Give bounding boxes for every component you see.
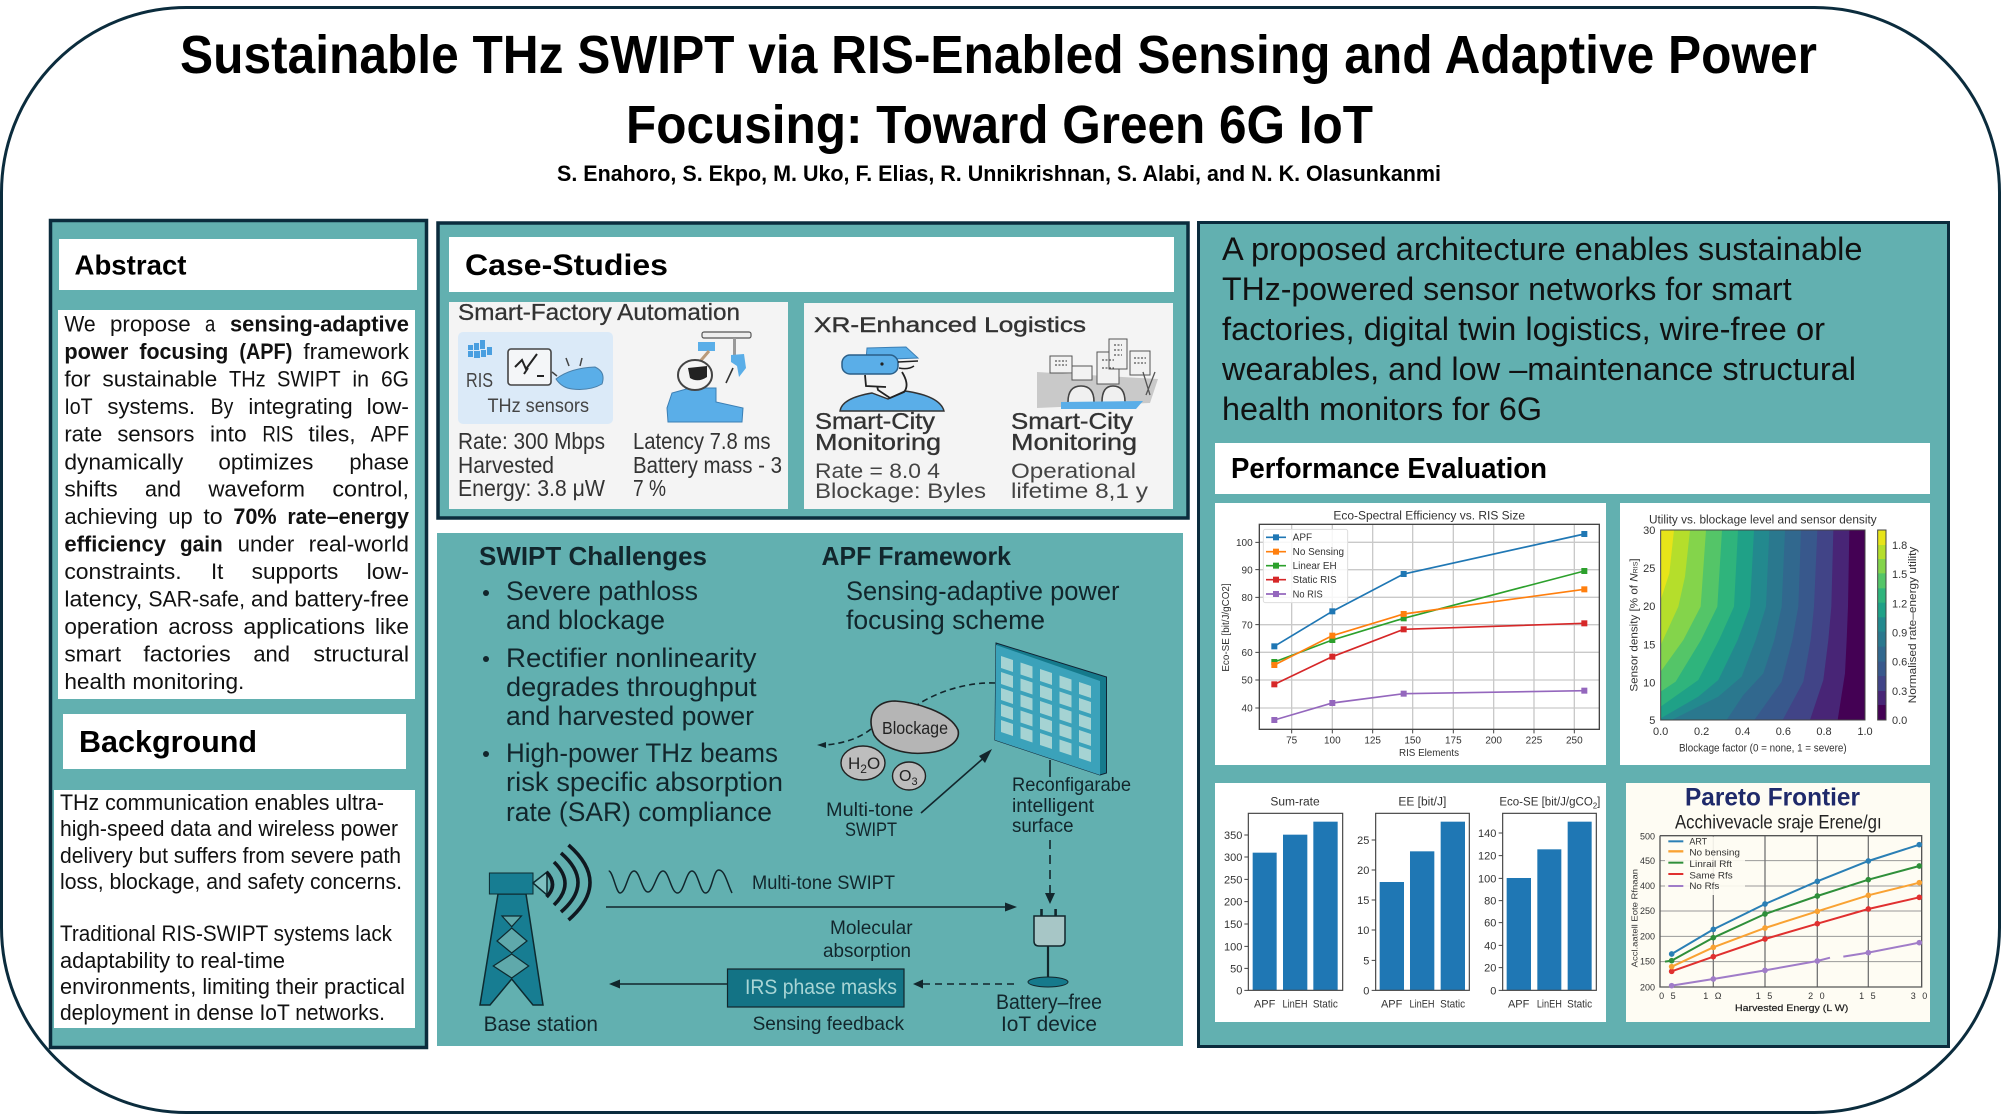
text block: abstract body: waveform (207, 476, 305, 501)
line chart: Pareto frontier: 500 (1640, 832, 1655, 842)
line chart: Pareto frontier: Same Rfs (1689, 870, 1733, 880)
text block: abstract body: low- (367, 559, 409, 584)
text block: abstract body: and (253, 641, 290, 666)
card: XR-enhanced logistics: Monitoring (815, 429, 941, 455)
text block: background body: deployment in dense IoT networks. (60, 1000, 385, 1025)
text block: abstract body: a (205, 311, 216, 336)
heading: performance evaluation: Performance Evaluation (1231, 453, 1547, 485)
bar chart: EE: 15 (1357, 895, 1369, 907)
text block: abstract body: propose (110, 311, 191, 336)
bar chart: sum-rate: 300 (1224, 852, 1242, 864)
bar chart: sum-rate: LinEH (1282, 998, 1308, 1010)
contour chart: utility vs blockage and sensor density: Blockage factor (0 = none, 1 = severe) (1679, 743, 1847, 755)
text block: proposed architecture summary: A proposed architecture enables sustainable (1222, 231, 1862, 267)
heading: background: Background (79, 724, 257, 759)
text block: abstract body: THz (229, 366, 266, 391)
card: XR-enhanced logistics: lifetime 8,1 y (1011, 480, 1149, 503)
text block: SWIPT challenges: Rectifier nonlinearity (506, 643, 757, 673)
contour chart: utility vs blockage and sensor density: 0.0 (1653, 726, 1668, 738)
line chart: eco-spectral efficiency vs RIS size: 40 (1242, 704, 1253, 715)
panel: SWIPT challenges and APF framework (437, 533, 1183, 1046)
heading: performance evaluation (1215, 443, 1930, 494)
text block: abstract body: SAR-safe, (148, 586, 245, 611)
line chart: Pareto frontier (1626, 783, 1930, 1022)
title: Focusing: Toward Green 6G IoT (626, 95, 1373, 155)
bar chart: EE: Static (1440, 998, 1466, 1010)
line chart: eco-spectral efficiency vs RIS size: 90 (1242, 565, 1253, 576)
contour chart: utility vs blockage and sensor density: 1.0 (1857, 726, 1873, 738)
card: smart-factory automation: 7 % (633, 475, 666, 501)
card: XR-enhanced logistics: Smart-City (1011, 408, 1134, 434)
line chart: Pareto frontier: 150 (1640, 957, 1655, 967)
text block: abstract body: control, (332, 476, 409, 501)
authors: S. Enahoro, S. Ekpo, M. Uko, F. Elias, R. Unnikrishnan, S. Alabi, and N. K. Olasunkanmi (557, 161, 1441, 186)
box: IRS phase masks (728, 969, 904, 1007)
line chart: Pareto frontier: 1 Ω (1703, 991, 1723, 1001)
bar chart: EE: 5 (1363, 955, 1369, 967)
line chart: Pareto frontier: 1 5 (1859, 991, 1878, 1001)
icon: smart city with bridge (1037, 339, 1158, 409)
text block: abstract body: applications (243, 614, 365, 639)
text block: background body: adaptability to real-time (60, 948, 285, 973)
label: molecular absorption (823, 917, 913, 962)
card: smart-factory automation: Harvested (458, 452, 554, 478)
icon: RIS and THz sensors: THz sensors (488, 396, 589, 417)
bar chart: eco-SE (1478, 795, 1600, 1010)
text block: abstract body: optimizes (218, 449, 313, 474)
bar chart: eco-SE: 120 (1478, 851, 1496, 863)
text block: abstract body: integrating (248, 394, 353, 419)
contour chart: utility vs blockage and sensor density (1620, 503, 1930, 765)
bar chart: sum-rate: Static (1313, 998, 1338, 1010)
text block: abstract body: low- (367, 394, 409, 419)
line chart: Pareto frontier: 1 5 (1756, 991, 1774, 1001)
card: XR-enhanced logistics: Rate = 8.0 4 (815, 460, 940, 483)
title (180, 25, 1817, 155)
contour chart: utility vs blockage and sensor density: 15 (1643, 639, 1655, 651)
line chart: eco-spectral efficiency vs RIS size: 225 (1526, 735, 1543, 746)
bar chart: sum-rate: 150 (1224, 919, 1242, 931)
contour chart: utility vs blockage and sensor density: Sensor density [% of NRIS] (1628, 558, 1640, 692)
text block: background body: delivery but suffers from severe path (60, 843, 401, 868)
card: smart-factory automation: Rate: 300 Mbps (458, 428, 605, 454)
text block: abstract body: sensing-adaptive (230, 311, 409, 336)
icon: water and ozone molecules: O (899, 768, 911, 785)
contour chart: utility vs blockage and sensor density: 30 (1643, 525, 1655, 537)
icon: water and ozone molecules: 3 (911, 776, 918, 788)
bar chart: eco-SE: LinEH (1537, 998, 1562, 1010)
line chart: Pareto frontier: ART (1689, 836, 1708, 846)
text block: abstract body: supports (252, 559, 338, 584)
line chart: eco-spectral efficiency vs RIS size: 250 (1566, 735, 1583, 746)
text block: proposed architecture summary (1221, 231, 1862, 427)
label: reconfigurable intelligent surface: intelligent (1012, 795, 1095, 817)
line chart: Pareto frontier: 400 (1640, 881, 1655, 891)
text block: abstract body: (APF) (239, 339, 292, 364)
bar chart: EE: 0 (1363, 985, 1369, 997)
contour chart: utility vs blockage and sensor density: 25 (1643, 563, 1655, 575)
contour chart: utility vs blockage and sensor density: 1.5 (1892, 569, 1907, 581)
text block: proposed architecture summary: wearables, and low –maintenance structural (1221, 351, 1856, 387)
text block: abstract body: power (64, 339, 129, 364)
title: Sustainable THz SWIPT via RIS-Enabled Sensing and Adaptive Power (180, 25, 1817, 85)
line chart: eco-spectral efficiency vs RIS size: 100 (1236, 538, 1253, 549)
text block: abstract body: structural (313, 641, 409, 666)
card: XR-enhanced logistics (804, 303, 1173, 509)
text block: SWIPT challenges: Severe pathloss (506, 576, 698, 606)
contour chart: utility vs blockage and sensor density: 0.9 (1892, 628, 1907, 640)
bar chart: EE: LinEH (1409, 998, 1435, 1010)
text block: abstract body: for (64, 366, 91, 391)
text block: SWIPT challenges: and harvested power (506, 701, 754, 731)
bar chart: EE: 10 (1357, 925, 1369, 937)
text block: abstract body: and (145, 476, 181, 501)
bar chart: eco-SE: 60 (1484, 918, 1496, 930)
text block: abstract body: battery-free (294, 586, 409, 611)
text block: background body: Traditional RIS-SWIPT systems lack (60, 921, 393, 946)
text block: abstract body: RIS (262, 421, 293, 446)
arrow: RIS to IoT device, dashed (1045, 840, 1055, 904)
bar chart: eco-SE: APF (1508, 998, 1530, 1010)
card: smart-factory automation (449, 299, 788, 509)
line chart: Pareto frontier: 0 5 (1659, 991, 1678, 1001)
line chart: Pareto frontier: 250 (1640, 906, 1655, 916)
card: XR-enhanced logistics: Operational (1011, 460, 1136, 483)
text block: abstract body: real-world (309, 531, 409, 556)
icon: blockage blob and reflected path: Blockage (882, 718, 948, 738)
label: battery-free IoT device: IoT device (1001, 1013, 1097, 1036)
label: molecular absorption: absorption (823, 940, 911, 962)
bar chart: sum-rate: 100 (1224, 941, 1242, 953)
card: smart-factory automation: Latency 7.8 ms (633, 428, 770, 454)
label: reconfigurable intelligent surface: Reconfigarabe (1012, 774, 1131, 796)
icon: person wearing XR headset (840, 347, 944, 411)
text block: proposed architecture summary: health monitors for 6G (1222, 391, 1542, 427)
bar chart: EE: 25 (1357, 835, 1369, 847)
icon: water and ozone molecules: O (867, 754, 880, 773)
bar chart: sum-rate (1224, 795, 1343, 1010)
label: battery-free IoT device (996, 991, 1102, 1036)
contour chart: utility vs blockage and sensor density: 0.6 (1892, 657, 1907, 669)
line chart: eco-spectral efficiency vs RIS size: APF (1293, 533, 1312, 544)
line chart: eco-spectral efficiency vs RIS size: 100 (1324, 735, 1341, 746)
text block: abstract body: By (211, 394, 234, 419)
bar charts: sum-rate, EE and eco-SE (1215, 783, 1606, 1022)
label: molecular absorption: Molecular (830, 917, 913, 939)
label: reconfigurable intelligent surface (1012, 774, 1131, 837)
line chart: Pareto frontier: 200 (1640, 983, 1655, 993)
line chart: eco-spectral efficiency vs RIS size: 200 (1485, 735, 1502, 746)
contour chart: utility vs blockage and sensor density: 0.2 (1694, 726, 1709, 738)
line chart: Pareto frontier: 2 0 (1808, 991, 1827, 1001)
bar chart: eco-SE: Static (1567, 998, 1593, 1010)
contour chart: utility vs blockage and sensor density: 10 (1643, 677, 1655, 689)
arrow: IoT device feedback to IRS masks (913, 980, 1014, 988)
icon: RIS and THz sensors (458, 332, 613, 424)
heading: case studies (449, 237, 1174, 292)
text block: abstract body: achieving (64, 504, 158, 529)
text block: SWIPT challenges: risk specific absorption (506, 767, 783, 797)
bar chart: EE: 20 (1357, 865, 1369, 877)
text block: abstract body: health monitoring. (64, 669, 244, 694)
text block: proposed architecture summary: THz-powered sensor networks for smart (1222, 271, 1792, 307)
text block: background body: environments, limiting their practical (60, 974, 405, 999)
icon: battery-free IoT device (1028, 909, 1068, 987)
bar chart: sum-rate: APF (1254, 998, 1276, 1010)
bar chart: sum-rate: 250 (1224, 874, 1242, 886)
text block: abstract body: rate–energy (287, 504, 409, 529)
text block: abstract body: 6G (381, 366, 409, 391)
text block: abstract body: rate (64, 421, 102, 446)
line chart: eco-spectral efficiency vs RIS size: Eco-SE [bit/J/gCO2] (1221, 583, 1232, 672)
line chart: Pareto frontier: No bensing (1689, 848, 1740, 858)
label: multi-tone SWIPT: SWIPT (845, 819, 897, 841)
line chart: Pareto frontier: Accl.aatell Eote Rfnaan (1629, 869, 1639, 967)
text block: background body: loss, blockage, and safety concerns. (60, 869, 402, 894)
text block: abstract body: framework (303, 339, 410, 364)
bar chart: sum-rate: 0 (1236, 985, 1242, 997)
line chart: Pareto frontier: 200 (1640, 931, 1655, 941)
text block: background body (54, 790, 415, 1028)
text block: abstract body: sensors (117, 421, 194, 446)
line chart: eco-spectral efficiency vs RIS size: No Sensing (1293, 547, 1344, 558)
heading: abstract: Abstract (74, 250, 186, 280)
contour chart: utility vs blockage and sensor density: 0.3 (1892, 686, 1907, 698)
line chart: eco-spectral efficiency vs RIS size: 80 (1242, 593, 1253, 604)
bar chart: EE: EE [bit/J] (1398, 795, 1446, 809)
text block: abstract body: gain (180, 531, 223, 556)
bar chart: eco-SE: 40 (1484, 940, 1496, 952)
text block: abstract body: and (251, 586, 288, 611)
card: smart-factory automation: Smart-Factory Automation (458, 299, 740, 325)
text block: abstract body: latency, (64, 586, 142, 611)
text block: abstract body: focusing (139, 339, 228, 364)
line chart: eco-spectral efficiency vs RIS size: Eco-Spectral Efficiency vs. RIS Size (1333, 508, 1525, 522)
bar chart: eco-SE: 2 (1593, 801, 1598, 810)
label: battery-free IoT device: Battery–free (996, 991, 1102, 1014)
text block: abstract body: across (168, 614, 233, 639)
text block: abstract body: factories (143, 641, 231, 666)
bar chart: sum-rate: 50 (1230, 963, 1242, 975)
panel: abstract and background (50, 220, 426, 1048)
line chart: eco-spectral efficiency vs RIS size: No RIS (1293, 589, 1323, 600)
text block: abstract body: sustainable (102, 366, 217, 391)
label: base station: Base station (484, 1013, 598, 1036)
card: XR-enhanced logistics: Monitoring (1011, 429, 1137, 455)
line chart: eco-spectral efficiency vs RIS size: RIS Elements (1399, 748, 1459, 759)
label: multi-tone SWIPT: Multi-tone (826, 799, 914, 821)
icon: base station tower (480, 845, 590, 1005)
text block: abstract body: in (352, 366, 369, 391)
text block: abstract body: dynamically (64, 449, 184, 474)
line chart: eco-spectral efficiency vs RIS size: 75 (1286, 735, 1298, 746)
contour chart: utility vs blockage and sensor density: 1.8 (1892, 540, 1907, 552)
heading: abstract (59, 239, 417, 290)
line chart: Pareto frontier: No Rfs (1689, 881, 1720, 891)
bar chart: EE (1357, 795, 1469, 1010)
text block: abstract body: We (64, 311, 96, 336)
line chart: Pareto frontier: Acchivevacle sraje Erene/gı (1675, 812, 1882, 833)
contour chart: utility vs blockage and sensor density: 20 (1643, 601, 1655, 613)
heading: background (63, 714, 406, 769)
line chart: eco-spectral efficiency vs RIS size: 175 (1445, 735, 1462, 746)
line chart: Pareto frontier: 450 (1640, 856, 1655, 866)
text block: abstract body: SWIPT (277, 366, 341, 391)
text block: APF framework: APF Framework (822, 541, 1012, 571)
text block: abstract body: to (203, 504, 223, 529)
bar chart: eco-SE: Eco-SE [bit/J/gCO (1499, 795, 1597, 809)
text block: abstract body: systems. (107, 394, 195, 419)
label: multi-tone SWIPT (826, 799, 914, 841)
text block: abstract body: like (375, 614, 409, 639)
line chart: Pareto frontier: 3 0 (1911, 991, 1929, 1001)
text block: abstract body (58, 310, 415, 699)
card: XR-enhanced logistics: XR-Enhanced Logistics (814, 314, 1086, 337)
icon: water and ozone molecules: 2 (860, 762, 867, 776)
bar chart: sum-rate: Sum-rate (1270, 795, 1320, 809)
icon: blockage blob and reflected path (817, 683, 995, 753)
text block: SWIPT challenges: degrades throughput (506, 672, 757, 702)
contour chart: utility vs blockage and sensor density: 0.4 (1735, 726, 1750, 738)
bar chart: EE: APF (1381, 998, 1403, 1010)
contour chart: utility vs blockage and sensor density: 0.0 (1892, 715, 1907, 727)
arrow: multi-tone SWIPT to RIS (921, 749, 992, 813)
line chart: eco-spectral efficiency vs RIS size: Static RIS (1293, 575, 1337, 586)
line chart: eco-spectral efficiency vs RIS size: 150 (1404, 735, 1421, 746)
panel: case studies (438, 223, 1188, 518)
text block: abstract body: under (238, 531, 295, 556)
contour chart: utility vs blockage and sensor density: 0.6 (1776, 726, 1791, 738)
text block: SWIPT challenges: and blockage (506, 605, 665, 635)
heading: case studies: Case-Studies (465, 249, 668, 282)
label: multi-tone SWIPT link: Multi-tone SWIPT (752, 872, 895, 894)
line chart: eco-spectral efficiency vs RIS size: 60 (1242, 648, 1253, 659)
text block: proposed architecture summary: factories, digital twin logistics, wire-free or (1222, 311, 1825, 347)
text block: SWIPT challenges (479, 541, 783, 827)
text block: APF framework: Sensing-adaptive power (846, 576, 1120, 606)
text block: abstract body: phase (349, 449, 409, 474)
text block: abstract body: IoT (64, 394, 93, 419)
text block: abstract body: smart (64, 641, 122, 666)
panel: proposed architecture and performance (1198, 222, 1948, 1046)
icon: water and ozone molecules (841, 746, 926, 790)
line chart: eco-spectral efficiency vs RIS size (1215, 503, 1606, 765)
text block: background body: THz communication enables ultra- (60, 790, 384, 815)
text block: APF framework: focusing scheme (846, 605, 1045, 635)
bar chart: eco-SE: 80 (1484, 896, 1496, 908)
bar chart: sum-rate: 350 (1224, 830, 1242, 842)
text block: SWIPT challenges: rate (SAR) compliance (506, 797, 772, 827)
text block: abstract body: APF (371, 421, 409, 446)
contour chart: utility vs blockage and sensor density: 0.8 (1816, 726, 1832, 738)
line chart: Pareto frontier: Harvested Energy (L W) (1735, 1003, 1848, 1013)
text block: abstract body: tiles, (308, 421, 356, 446)
bar chart: sum-rate: 200 (1224, 897, 1242, 909)
text block: abstract body: into (210, 421, 247, 446)
text block: SWIPT challenges: SWIPT Challenges (479, 541, 707, 571)
icon: reconfigurable intelligent surface (995, 643, 1106, 777)
icon: water and ozone molecules: H (848, 754, 860, 773)
bar chart: eco-SE: 0 (1490, 985, 1496, 997)
box: IRS phase masks: IRS phase masks (745, 976, 897, 999)
contour chart: utility vs blockage and sensor density: 5 (1649, 715, 1655, 727)
label: reconfigurable intelligent surface: surface (1012, 815, 1074, 837)
text block: abstract body: operation (64, 614, 158, 639)
card: smart-factory automation: Energy: 3.8 μW (458, 475, 605, 501)
icon: multi-tone waveform (609, 870, 732, 893)
text block: abstract body: shifts (64, 476, 118, 501)
text block: abstract body: up (168, 504, 193, 529)
text block: abstract body: 70% (233, 504, 277, 529)
line chart: Pareto frontier: Pareto Frontier (1685, 784, 1860, 812)
card: XR-enhanced logistics: Smart-City (815, 408, 936, 434)
bar chart: eco-SE: 100 (1478, 873, 1496, 885)
card: XR-enhanced logistics: Blockage: Byles (815, 480, 986, 503)
bar chart: eco-SE: ] (1597, 795, 1600, 809)
icon: factory worker with robot arm (667, 332, 751, 422)
text block: APF framework (822, 541, 1120, 635)
line chart: eco-spectral efficiency vs RIS size: 125 (1364, 735, 1381, 746)
text block: background body: high-speed data and wireless power (60, 816, 398, 841)
bar chart: eco-SE: 20 (1484, 963, 1496, 975)
arrow: IRS masks to base station (609, 980, 727, 988)
arrow: base station to IoT device (606, 902, 1017, 912)
line chart: eco-spectral efficiency vs RIS size: 70 (1242, 620, 1253, 631)
label: sensing feedback: Sensing feedback (753, 1013, 904, 1035)
contour chart: utility vs blockage and sensor density: Normalised rate–energy utility (1907, 546, 1919, 703)
icon: RIS and THz sensors: RIS (466, 370, 493, 392)
card: smart-factory automation: Battery mass - 3 (633, 452, 782, 478)
bar chart: eco-SE: 140 (1478, 828, 1496, 840)
line chart: eco-spectral efficiency vs RIS size: Linear EH (1293, 561, 1337, 572)
line chart: Pareto frontier: Linrail Rft (1689, 859, 1733, 869)
contour chart: utility vs blockage and sensor density: Utility vs. blockage level and sensor density (1649, 512, 1877, 526)
text block: SWIPT challenges: High-power THz beams (506, 738, 778, 768)
contour chart: utility vs blockage and sensor density: 1.2 (1892, 598, 1907, 610)
text block: abstract body: It (211, 559, 224, 584)
line chart: eco-spectral efficiency vs RIS size: 50 (1242, 676, 1253, 687)
text block: abstract body: efficiency (64, 531, 166, 556)
text block: abstract body: constraints. (64, 559, 182, 584)
